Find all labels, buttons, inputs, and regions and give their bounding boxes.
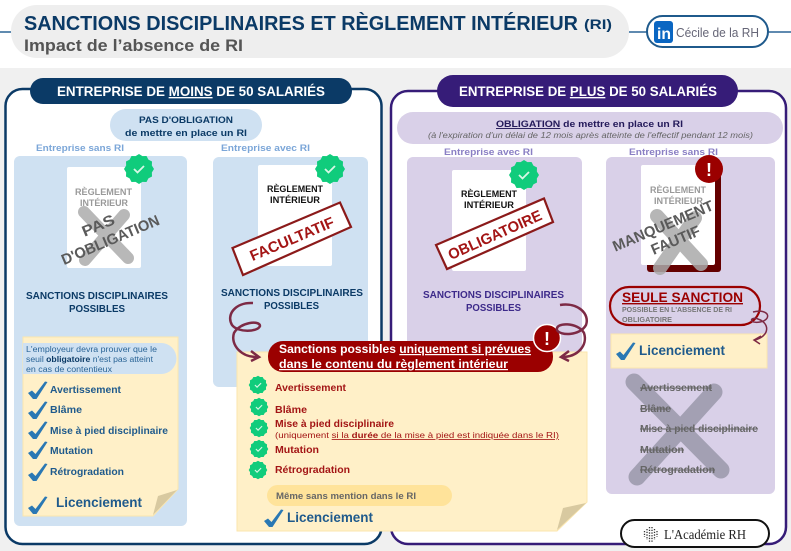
pill: obligation: (à l'expiration d'un délai de 12 mois après atteinte de l'effectif pendant 12 mois)	[428, 131, 753, 140]
document: règlement obligatoire: RÈGLEMENT	[461, 189, 517, 199]
arrow: boucle seule sanction	[752, 311, 768, 344]
arrow: boucle gauche	[230, 303, 260, 361]
heading: sanctions possibles	[423, 290, 564, 314]
list: sanctions prévues: Avertissement	[275, 382, 346, 394]
label: entreprise sans RI: Entreprise sans RI	[36, 143, 124, 154]
list: sanctions: Rétrogradation	[50, 466, 124, 478]
item: licenciement: Licenciement	[287, 509, 373, 525]
icon: alerte: !	[706, 160, 712, 180]
panel: plus de 50 salariés	[391, 75, 786, 544]
title block: SANCTIONS DISCIPLINAIRES ET RÈGLEMENT INTÉRIEUR	[24, 12, 578, 35]
list: sanctions: Licenciement	[56, 494, 142, 510]
label: entreprise sans RI: Entreprise sans RI	[629, 147, 718, 158]
heading: plus de 50	[437, 75, 738, 107]
document: règlement barré	[52, 167, 162, 269]
item: licenciement	[264, 509, 373, 527]
title block: (RI)	[584, 16, 612, 32]
list: sanctions prévues: Rétrogradation	[275, 464, 350, 476]
list: sanctions prévues	[249, 376, 559, 479]
card: entreprise avec RI	[213, 154, 368, 387]
icon: validation	[124, 154, 154, 184]
bubble: preuve: L'employeur devra prouver que le	[26, 345, 157, 354]
document: règlement barré: RÈGLEMENT	[75, 187, 132, 197]
document: manquement fautif	[610, 165, 723, 272]
list: sanctions: Blâme	[50, 404, 82, 416]
note: licenciement: Licenciement	[639, 342, 725, 358]
banner: sanctions possibles: dans le contenu du règlement intérieur	[279, 357, 508, 371]
note: licenciement	[611, 334, 767, 368]
document: règlement barré: INTÉRIEUR	[80, 198, 128, 208]
list: sanctions barrées: Mise à pied disciplinaire	[640, 423, 758, 435]
list: sanctions barrées	[634, 382, 758, 477]
stamp: obligatoire: OBLIGATOIRE	[446, 207, 545, 264]
title block	[11, 5, 629, 58]
label: entreprise avec RI: Entreprise avec RI	[221, 143, 310, 154]
heading: sanctions possibles	[26, 291, 168, 315]
list: sanctions prévues: Mutation	[275, 444, 319, 456]
list: sanctions prévues: (uniquement si la durée de la mise à pied est indiquée dans le RI)	[275, 431, 559, 440]
callout: seule sanction	[610, 287, 760, 325]
card: entreprise sans RI	[14, 154, 187, 526]
stamp: facultatif	[232, 202, 351, 275]
heading: sanctions possibles: POSSIBLES	[69, 304, 125, 315]
icon: validation	[315, 154, 345, 184]
heading: moins de 50: ENTREPRISE DE MOINS DE 50 SALARIÉS	[57, 84, 325, 99]
list: sanctions barrées: Rétrogradation	[640, 464, 715, 476]
linkedin badge: in	[657, 26, 671, 43]
list: sanctions prévues: Blâme	[275, 404, 307, 416]
document: manquement fautif: MANQUEMENT	[610, 198, 716, 255]
callout: seule sanction: POSSIBLE EN L'ABSENCE DE RI	[622, 307, 732, 314]
heading: sanctions possibles: SANCTIONS DISCIPLINAIRES	[423, 290, 564, 301]
stamp: facultatif: FACULTATIF	[247, 214, 337, 265]
pill: pas d'obligation: de mettre en place un RI	[125, 128, 247, 139]
heading: sanctions possibles	[221, 288, 363, 312]
pill: même sans mention	[267, 485, 452, 506]
arrow: boucle droite	[557, 305, 587, 361]
pill: pas d'obligation: PAS D'OBLIGATION	[139, 115, 233, 126]
list: sanctions prévues: Mise à pied disciplinaire	[275, 418, 394, 430]
document: règlement obligatoire: INTÉRIEUR	[464, 200, 515, 210]
card: entreprise avec RI	[407, 157, 582, 367]
icon: alerte: !	[544, 329, 550, 349]
list: sanctions: Mutation	[50, 445, 93, 457]
heading: sanctions possibles: SANCTIONS DISCIPLINAIRES	[26, 291, 168, 302]
pill: obligation	[397, 112, 783, 144]
note: sanctions	[23, 337, 178, 516]
callout: seule sanction: SEULE SANCTION	[622, 289, 743, 305]
heading: moins de 50	[30, 78, 352, 104]
bubble: preuve: seuil obligatoire n'est pas atteint	[26, 355, 154, 364]
banner: sanctions possibles	[268, 341, 553, 372]
icon: alerte	[695, 155, 723, 183]
card: entreprise sans RI	[606, 155, 775, 494]
panel: moins de 50 salariés	[6, 78, 382, 544]
list: sanctions barrées: Blâme	[640, 403, 671, 415]
logo: l'académie RH: L'Académie RH	[664, 527, 746, 542]
list: sanctions barrées: Avertissement	[640, 382, 712, 394]
title block: Impact de l’absence de RI	[24, 36, 243, 55]
linkedin badge	[647, 16, 768, 47]
list: sanctions barrées: Mutation	[640, 444, 684, 456]
note: sanctions selon le RI	[237, 324, 587, 531]
list: sanctions: Avertissement	[50, 384, 121, 396]
logo: l'académie RH	[621, 520, 769, 547]
banner: sanctions possibles: Sanctions possibles uniquement si prévues	[279, 342, 531, 356]
heading: sanctions possibles: POSSIBLES	[264, 301, 319, 312]
document: règlement facultatif: INTÉRIEUR	[270, 195, 321, 205]
linkedin badge: Cécile de la RH	[676, 25, 759, 40]
label: entreprise avec RI: Entreprise avec RI	[444, 147, 533, 158]
heading: plus de 50: ENTREPRISE DE PLUS DE 50 SALARIÉS	[459, 84, 717, 99]
document: manquement fautif: FAUTIF	[648, 223, 703, 259]
icon: validation	[509, 160, 539, 190]
bubble: preuve: en cas de contentieux	[26, 365, 112, 374]
bubble: preuve	[23, 343, 176, 374]
pill: même sans mention: Même sans mention dans le RI	[276, 491, 416, 502]
list: sanctions: Mise à pied disciplinaire	[50, 425, 168, 437]
document: règlement facultatif: RÈGLEMENT	[267, 184, 323, 194]
document: règlement barré: PAS	[79, 212, 117, 241]
document: règlement obligatoire	[452, 170, 526, 271]
document: manquement fautif: INTÉRIEUR	[654, 196, 703, 206]
heading: sanctions possibles: POSSIBLES	[466, 303, 521, 314]
icon: alerte	[534, 324, 560, 352]
heading: sanctions possibles: SANCTIONS DISCIPLINAIRES	[221, 288, 363, 299]
document: manquement fautif: RÈGLEMENT	[650, 185, 706, 195]
callout: seule sanction: OBLIGATOIRE	[622, 317, 672, 324]
pill: obligation: OBLIGATION de mettre en place un RI	[496, 119, 683, 130]
pill: pas d'obligation	[110, 109, 262, 141]
list: sanctions	[28, 382, 168, 514]
document: règlement barré: D'OBLIGATION	[59, 212, 162, 269]
document: règlement facultatif	[258, 165, 332, 266]
